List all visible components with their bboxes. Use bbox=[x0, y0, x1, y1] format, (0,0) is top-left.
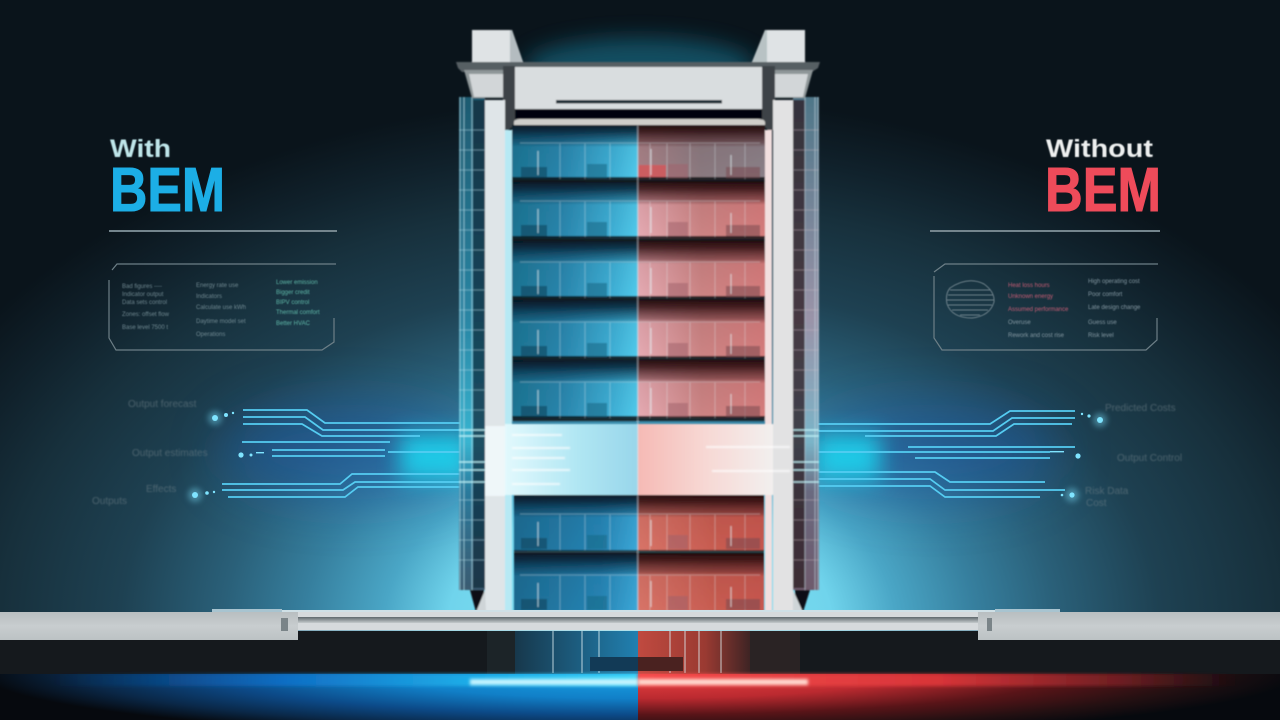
basement bbox=[0, 631, 1280, 674]
info card: Guess use bbox=[1088, 320, 1117, 326]
info card: Zones: offset flow bbox=[122, 312, 170, 318]
floor 1 bbox=[638, 125, 765, 180]
ground slab bbox=[0, 609, 1280, 640]
roof blocks bbox=[472, 30, 805, 62]
info card: Poor comfort bbox=[1088, 292, 1123, 298]
info card: Rework and cost rise bbox=[1008, 333, 1065, 339]
floor 3 bbox=[638, 241, 765, 298]
right circuit lines with glow bbox=[800, 404, 1107, 502]
heading: Without: Without bbox=[1046, 135, 1154, 163]
circuit labels left: Outputs bbox=[92, 496, 127, 507]
floors: blue half (with BEM) bbox=[512, 125, 638, 611]
info card: Daytime model set bbox=[196, 319, 246, 325]
floors: red half (without BEM) bbox=[638, 125, 765, 611]
info card: Bad figures ---- bbox=[122, 284, 162, 290]
floor 2 bbox=[638, 182, 765, 239]
side glass left bbox=[459, 97, 485, 612]
floor 2 bbox=[512, 182, 638, 239]
roof slab and brackets bbox=[456, 62, 820, 130]
info card bbox=[934, 264, 1158, 350]
info card: High operating cost bbox=[1088, 279, 1140, 285]
info card bbox=[109, 264, 336, 350]
icon: stacked scan shape bbox=[946, 281, 994, 318]
info card: Calculate use kWh bbox=[196, 305, 246, 311]
floor 7 bbox=[514, 553, 638, 611]
heading: With: With bbox=[110, 135, 171, 163]
info card: Indicator output bbox=[122, 292, 164, 298]
floor 7 bbox=[638, 553, 764, 611]
left panel: With BEM bbox=[109, 135, 337, 350]
bottom glow bands bbox=[0, 674, 1280, 720]
info card: BIPV control bbox=[276, 300, 309, 306]
floor slabs bbox=[512, 177, 765, 554]
heading: BEM: BEM bbox=[110, 156, 225, 225]
circuit labels left: Output forecast bbox=[128, 399, 197, 410]
floor 4 bbox=[512, 300, 638, 358]
floor 3 bbox=[512, 241, 638, 298]
info card: Data sets control bbox=[122, 300, 167, 306]
left end nodes bbox=[188, 411, 264, 502]
info card: Bigger credit bbox=[276, 290, 310, 296]
info card: Operations bbox=[196, 332, 225, 338]
bright glowing band bbox=[485, 424, 790, 496]
circuit labels right: Output Control bbox=[1117, 453, 1182, 464]
info card: Heat loss hours bbox=[1008, 283, 1050, 289]
circuit labels left: Output estimates bbox=[132, 448, 208, 459]
circuit labels right: Predicted Costs bbox=[1105, 403, 1176, 414]
window mullions and interior furnishings bbox=[520, 143, 760, 611]
floor 6 bbox=[514, 495, 638, 551]
heading: BEM: BEM bbox=[1045, 156, 1161, 225]
info card: Lower emission bbox=[276, 280, 318, 286]
floor 4 bbox=[638, 300, 765, 358]
penthouse panel with slit bbox=[514, 67, 765, 125]
info card: Base level 7500 t bbox=[122, 325, 168, 331]
circuit labels left: Effects bbox=[146, 484, 176, 495]
info card: Risk level bbox=[1088, 333, 1114, 339]
left circuit lines with glow bbox=[188, 404, 480, 502]
info card: Assumed performance bbox=[1008, 307, 1069, 313]
info card: Thermal comfort bbox=[276, 310, 320, 316]
central divide bbox=[637, 125, 638, 615]
info card: Better HVAC bbox=[276, 321, 311, 327]
right end nodes bbox=[1050, 413, 1107, 502]
floor 1 bbox=[512, 125, 638, 180]
circuit labels right: Cost bbox=[1086, 498, 1107, 509]
info card: Energy rate use bbox=[196, 283, 239, 289]
info card: Late design change bbox=[1088, 305, 1141, 311]
floor 6 bbox=[638, 495, 764, 551]
building bbox=[456, 30, 820, 615]
info card: Indicators bbox=[196, 294, 222, 300]
circuit labels left bbox=[92, 399, 208, 507]
circuit labels right: Risk Data bbox=[1085, 486, 1129, 497]
floor 5 bbox=[638, 360, 765, 418]
circuit labels right bbox=[1085, 403, 1182, 509]
floor 5 bbox=[512, 360, 638, 418]
info card: Overuse bbox=[1008, 320, 1031, 326]
side glass right bbox=[793, 97, 819, 612]
right panel: Without BEM bbox=[930, 135, 1161, 350]
info card: Unknown energy bbox=[1008, 294, 1053, 300]
façade columns bbox=[476, 100, 803, 612]
